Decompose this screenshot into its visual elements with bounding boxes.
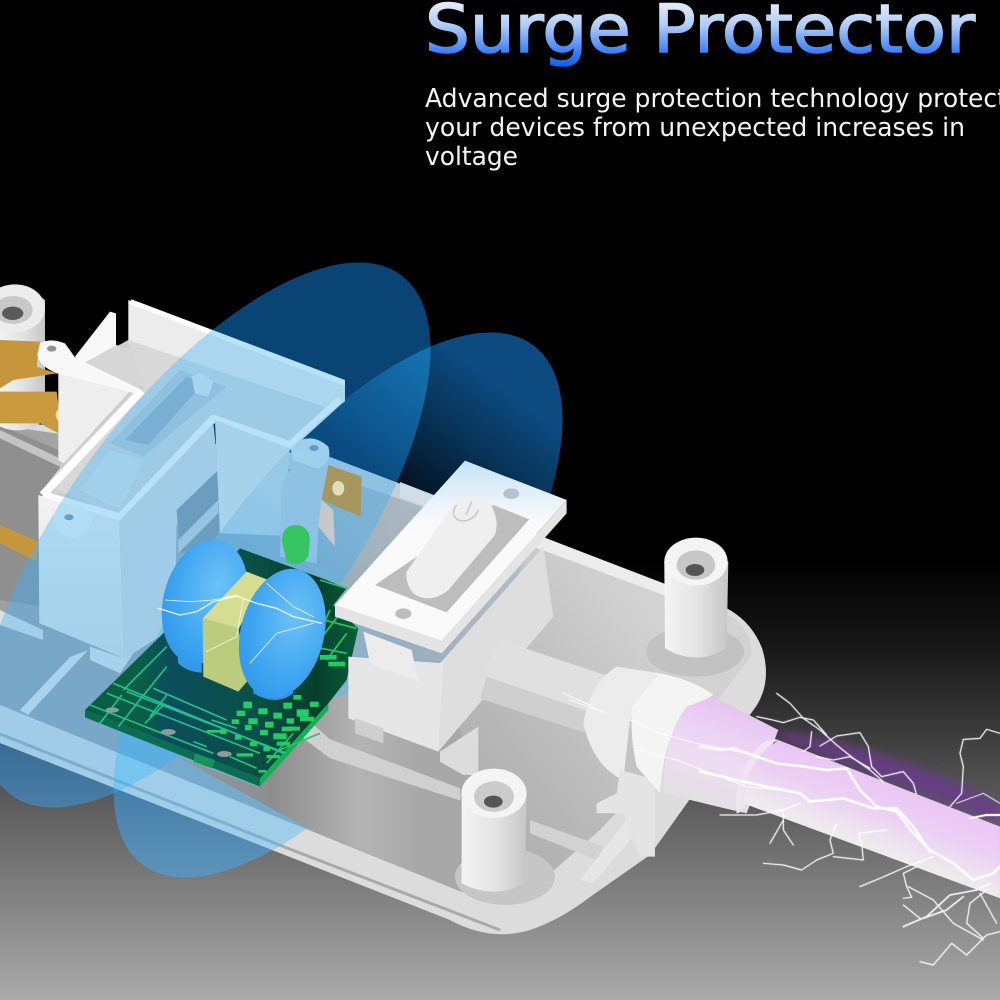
brass tab hole	[56, 408, 66, 422]
compartment ledge	[0, 610, 43, 640]
tube shadow	[480, 677, 593, 733]
opening rail	[178, 500, 218, 553]
compartment ribs	[20, 650, 88, 715]
plate top	[335, 461, 567, 641]
flange hole front	[64, 514, 74, 520]
main white housing box	[37, 299, 345, 673]
clamp	[597, 770, 655, 857]
box rim	[43, 391, 341, 517]
plate bracket	[318, 500, 335, 547]
shield tint	[32, 262, 644, 948]
shield glow	[0, 192, 512, 878]
green indicator LED	[282, 525, 310, 564]
shell rim	[0, 420, 766, 934]
right coil	[226, 560, 339, 707]
plate hole top	[503, 488, 519, 499]
switch body right face	[438, 547, 553, 752]
foot right	[440, 727, 478, 775]
slider slot	[125, 377, 203, 445]
thin bolts	[720, 693, 1000, 965]
switch body front	[348, 657, 443, 752]
description text: your devices from unexpected increases in	[425, 113, 965, 143]
back rim highlight	[400, 482, 725, 618]
green circuit board	[85, 530, 358, 787]
inner ribs	[297, 710, 638, 883]
brass tab 1	[0, 340, 57, 388]
description text: voltage	[425, 142, 518, 172]
floor right of shield	[178, 660, 480, 895]
traces left	[90, 647, 287, 753]
screw post bottom	[455, 769, 555, 905]
box left face	[38, 495, 124, 658]
capacitor front	[203, 618, 248, 692]
foot left	[355, 718, 383, 743]
rear wall	[58, 363, 133, 463]
short rib	[530, 820, 603, 860]
post base	[646, 627, 744, 677]
brass tab 3	[0, 525, 38, 562]
vertical fin	[75, 312, 116, 367]
flange tab front	[53, 504, 93, 538]
side lump	[80, 450, 143, 510]
rocker	[406, 497, 497, 598]
blue shield ellipse rear	[0, 192, 512, 878]
description text	[425, 84, 1000, 172]
plate opening	[375, 505, 529, 612]
back wall top	[128, 299, 345, 386]
long rib	[297, 710, 461, 801]
flange hole top	[47, 346, 56, 352]
floor band	[0, 430, 63, 468]
rear socket and brass tabs	[0, 284, 72, 562]
purple sleeve	[663, 697, 778, 813]
plate side	[335, 500, 567, 653]
switch assembly	[335, 461, 567, 775]
column under flange	[280, 463, 328, 563]
cord	[743, 740, 1000, 898]
inner tube	[480, 640, 610, 733]
slider cube	[192, 373, 213, 397]
power icon	[454, 502, 478, 521]
post hole	[686, 564, 704, 576]
rear grommet	[583, 667, 660, 780]
post base	[455, 848, 555, 905]
rear left floor	[0, 425, 63, 610]
post hole	[2, 307, 23, 320]
flange hole right	[309, 445, 319, 451]
post body	[664, 562, 728, 657]
shell floor	[0, 425, 752, 895]
plate hole bottom	[395, 608, 411, 619]
flange tab top	[37, 340, 138, 393]
shield glow	[32, 262, 644, 948]
box opening	[177, 470, 220, 553]
post rim	[664, 538, 728, 586]
post rim	[461, 769, 527, 818]
box base skirt	[90, 647, 133, 673]
lightning on coils	[158, 583, 322, 663]
interior floor	[50, 340, 333, 517]
post hole	[484, 796, 503, 808]
power cord and strain relief	[480, 640, 1000, 898]
front rim groove	[0, 734, 500, 930]
interior filler	[40, 340, 333, 527]
right block face	[215, 420, 310, 537]
main bolts	[700, 747, 1000, 880]
metal plate	[318, 465, 362, 547]
right coil leg	[253, 677, 293, 700]
sleeve end	[736, 739, 778, 813]
end wall	[580, 817, 638, 883]
purple glow behind cord	[780, 732, 1000, 823]
metal plate hole	[332, 481, 344, 496]
brass tab 2	[0, 392, 72, 440]
back wall	[128, 300, 345, 420]
shield tint	[0, 192, 512, 878]
ic block	[193, 753, 215, 768]
traces right	[230, 580, 357, 768]
post inner ring	[0, 296, 33, 324]
shell base	[0, 420, 766, 934]
screw post top right	[646, 538, 744, 677]
yellow capacitor	[203, 572, 268, 692]
blue shield ellipse front	[32, 262, 644, 948]
left coil	[149, 530, 261, 673]
post inner	[474, 781, 514, 812]
box right face	[119, 423, 218, 658]
rear block	[83, 345, 177, 388]
board edge right	[260, 703, 328, 787]
screw post	[0, 288, 45, 430]
board edge left	[85, 710, 260, 787]
solder dots	[106, 707, 232, 757]
post body	[462, 793, 527, 892]
capacitor top	[203, 572, 268, 628]
board face	[85, 548, 358, 778]
lightning bolts	[700, 693, 1000, 965]
clip	[363, 632, 418, 682]
flange tab right	[290, 438, 329, 468]
lightning on cord	[563, 693, 778, 790]
slider switch frame	[110, 370, 227, 457]
front grommet	[631, 673, 713, 793]
component pads	[207, 655, 345, 773]
left coil leg	[177, 647, 202, 673]
post top	[0, 284, 45, 332]
post inner	[677, 550, 715, 580]
